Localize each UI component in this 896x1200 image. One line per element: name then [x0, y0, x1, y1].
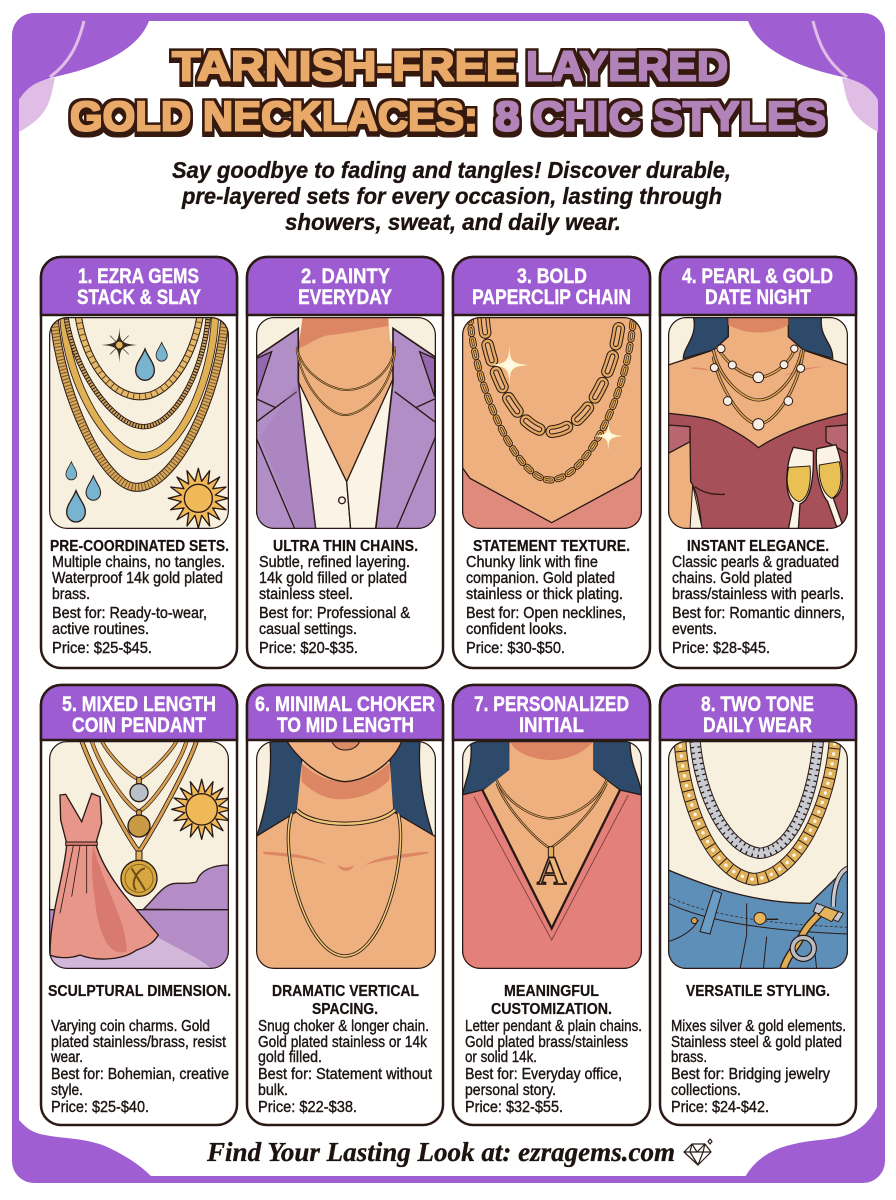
- card 3 text: STATEMENT TEXTURE.: [473, 538, 630, 555]
- card 5 text: [48, 983, 231, 1116]
- panel: card 1: [41, 257, 237, 668]
- panel: card 4: [660, 257, 856, 668]
- pendant letter A: A: [537, 848, 567, 893]
- card 8 illustration: two tone chains and jeans: [668, 741, 848, 969]
- card 6 text: Best for: Statement without: [258, 1066, 433, 1083]
- subtitle: showers, sweat, and daily wear.: [285, 209, 621, 235]
- card 4 header: [660, 257, 856, 315]
- card 6 text: gold filled.: [258, 1049, 322, 1066]
- card 6 text: bulk.: [258, 1082, 288, 1099]
- card 4 text: INSTANT ELEGANCE.: [687, 538, 829, 555]
- card 4 text: Classic pearls & graduated: [672, 554, 839, 571]
- card 1 illustration: layered chains with water drops and sun: [49, 317, 229, 529]
- panel: card 2: [247, 257, 443, 668]
- card 8 text: collections.: [671, 1082, 741, 1099]
- card 7 text: CUSTOMIZATION.: [491, 1001, 612, 1018]
- card 8 header: [660, 685, 856, 740]
- card 2 header: 2. DAINTY: [301, 265, 390, 288]
- card 1 text: active routines.: [52, 621, 149, 638]
- card 3 text: companion. Gold plated: [466, 570, 615, 587]
- card 6 header: [247, 685, 443, 740]
- card 2 header: EVERYDAY: [298, 286, 392, 309]
- card 1 header: STACK & SLAY: [77, 286, 201, 309]
- title: LAYERED: [526, 42, 728, 90]
- card 7 text: [465, 983, 642, 1116]
- card 8 text: [671, 983, 846, 1116]
- card 2 text: Best for: Professional &: [259, 605, 411, 622]
- card 8 text: brass.: [671, 1049, 707, 1066]
- card 5 text: SCULPTURAL DIMENSION.: [48, 983, 231, 1000]
- card 3 header: 3. BOLD: [517, 265, 587, 288]
- icon: diamond: [684, 1139, 712, 1165]
- card 7 header: 7. PERSONALIZED: [474, 693, 629, 716]
- card 5 text: Varying coin charms. Gold: [51, 1018, 210, 1035]
- card 4 text: chains. Gold plated: [672, 570, 792, 587]
- card 6 illustration: choker and long chain: [256, 741, 436, 969]
- card 2 text: Subtle, refined layering.: [259, 554, 410, 571]
- card 5 text: Best for: Bohemian, creative: [51, 1066, 229, 1083]
- card 7 illustration: initial pendant on pink V-neck: [462, 741, 642, 969]
- panel: card 6: [247, 685, 443, 1125]
- curtain: bottom left: [19, 1120, 152, 1177]
- subtitle: [172, 157, 731, 235]
- card 2 text: Price: $20-$35.: [259, 640, 358, 657]
- subtitle: Say goodbye to fading and tangles! Discover durable,: [172, 157, 731, 183]
- card 2 text: casual settings.: [259, 621, 357, 638]
- curtain: top right: [748, 21, 878, 132]
- panel: card 3: [453, 257, 650, 668]
- card 5 header: COIN PENDANT: [72, 714, 206, 737]
- card 7 text: Letter pendant & plain chains.: [465, 1018, 642, 1035]
- card 8 header: 8. TWO TONE: [701, 693, 814, 716]
- card 1 header: [41, 257, 237, 315]
- card 7 text: MEANINGFUL: [504, 983, 599, 1000]
- card 8 header: DAILY WEAR: [703, 714, 812, 737]
- footer call to action: Find Your Lasting Look at: ezragems.com: [206, 1137, 675, 1167]
- card 4 text: brass/stainless with pearls.: [672, 586, 844, 603]
- card 3 text: Price: $30-$50.: [466, 640, 565, 657]
- card 4 header: DATE NIGHT: [705, 286, 811, 309]
- title: [70, 42, 826, 140]
- card 3 text: confident looks.: [466, 621, 567, 638]
- card 7 text: or solid 14k.: [465, 1049, 537, 1066]
- card 8 text: Best for: Bridging jewelry: [671, 1066, 830, 1083]
- card 7 header: [453, 685, 650, 740]
- card 4 text: Best for: Romantic dinners,: [672, 605, 845, 622]
- card 7 text: Best for: Everyday office,: [465, 1066, 622, 1083]
- card 3 text: Chunky link with fine: [466, 554, 598, 571]
- card 4 header: 4. PEARL & GOLD: [682, 265, 833, 288]
- panel: card 7: [453, 685, 650, 1125]
- title: TARNISH-FREE: [172, 42, 517, 90]
- card 5 illustration: coin pendants and dress: [49, 741, 232, 969]
- card 6 text: [258, 983, 433, 1116]
- card 5 text: wear.: [50, 1049, 83, 1066]
- card 2 text: 14k gold filled or plated: [259, 570, 407, 587]
- card 5 header: 5. MIXED LENGTH: [62, 693, 216, 716]
- card 6 header: TO MID LENGTH: [277, 714, 414, 737]
- card 1 header: 1. EZRA GEMS: [78, 265, 199, 288]
- card 5 text: Price: $25-$40.: [51, 1099, 149, 1116]
- title: GOLD NECKLACES:: [70, 92, 478, 140]
- card 2 text: stainless steel.: [259, 586, 353, 603]
- card 1 text: [50, 538, 229, 657]
- card 6 text: SPACING.: [312, 1001, 378, 1018]
- card 3 text: Best for: Open necklines,: [466, 605, 626, 622]
- card 8 text: Price: $24-$42.: [671, 1099, 769, 1116]
- subtitle: pre-layered sets for every occasion, lasting through: [181, 183, 722, 209]
- card 4 text: Price: $28-$45.: [672, 640, 770, 657]
- card 3 header: [453, 257, 650, 315]
- card 5 text: plated stainless/brass, resist: [51, 1034, 227, 1051]
- card 8 text: Mixes silver & gold elements.: [671, 1018, 846, 1035]
- card 3 text: [466, 538, 630, 657]
- card 4 illustration: pearls, dress and champagne: [668, 317, 848, 529]
- card 2 text: ULTRA THIN CHAINS.: [273, 538, 418, 555]
- card 8 text: VERSATILE STYLING.: [686, 983, 830, 1000]
- card 6 header: 6. MINIMAL CHOKER: [255, 693, 435, 716]
- card 6 text: DRAMATIC VERTICAL: [272, 983, 419, 1000]
- curtain: bottom right: [745, 1105, 878, 1177]
- card 4 text: [672, 538, 845, 657]
- card 2 illustration: blazer and thin chains: [256, 317, 436, 529]
- card 1 text: Best for: Ready-to-wear,: [52, 605, 207, 622]
- card 2 header: [247, 257, 443, 315]
- panel: card 5: [41, 685, 237, 1125]
- curtain: top left: [19, 21, 149, 132]
- card 3 text: stainless or thick plating.: [466, 586, 623, 603]
- card 1 text: brass.: [52, 586, 90, 603]
- card 5 header: [41, 685, 237, 740]
- card 3 header: PAPERCLIP CHAIN: [472, 286, 631, 309]
- title: 8 CHIC STYLES: [495, 92, 826, 140]
- card 1 text: Price: $25-$45.: [52, 640, 152, 657]
- card 6 text: Gold plated stainless or 14k: [258, 1034, 427, 1051]
- card 7 text: Price: $32-$55.: [465, 1099, 563, 1116]
- card 1 text: Multiple chains, no tangles.: [52, 554, 225, 571]
- card 8 text: Stainless steel & gold plated: [671, 1034, 842, 1051]
- panel: card 8: [660, 685, 856, 1125]
- card 6 text: Snug choker & longer chain.: [258, 1018, 429, 1035]
- card 1 text: PRE-COORDINATED SETS.: [50, 538, 229, 555]
- card 7 text: personal story.: [465, 1082, 556, 1099]
- card 5 text: style.: [51, 1082, 83, 1099]
- card 2 text: [259, 538, 418, 657]
- card 3 illustration: bold paperclip chain: [462, 317, 642, 529]
- card 4 text: events.: [672, 621, 717, 638]
- card 7 text: Gold plated brass/stainless: [465, 1034, 628, 1051]
- card 6 text: Price: $22-$38.: [258, 1099, 357, 1116]
- card 1 text: Waterproof 14k gold plated: [52, 570, 223, 587]
- card 7 header: INITIAL: [519, 714, 584, 737]
